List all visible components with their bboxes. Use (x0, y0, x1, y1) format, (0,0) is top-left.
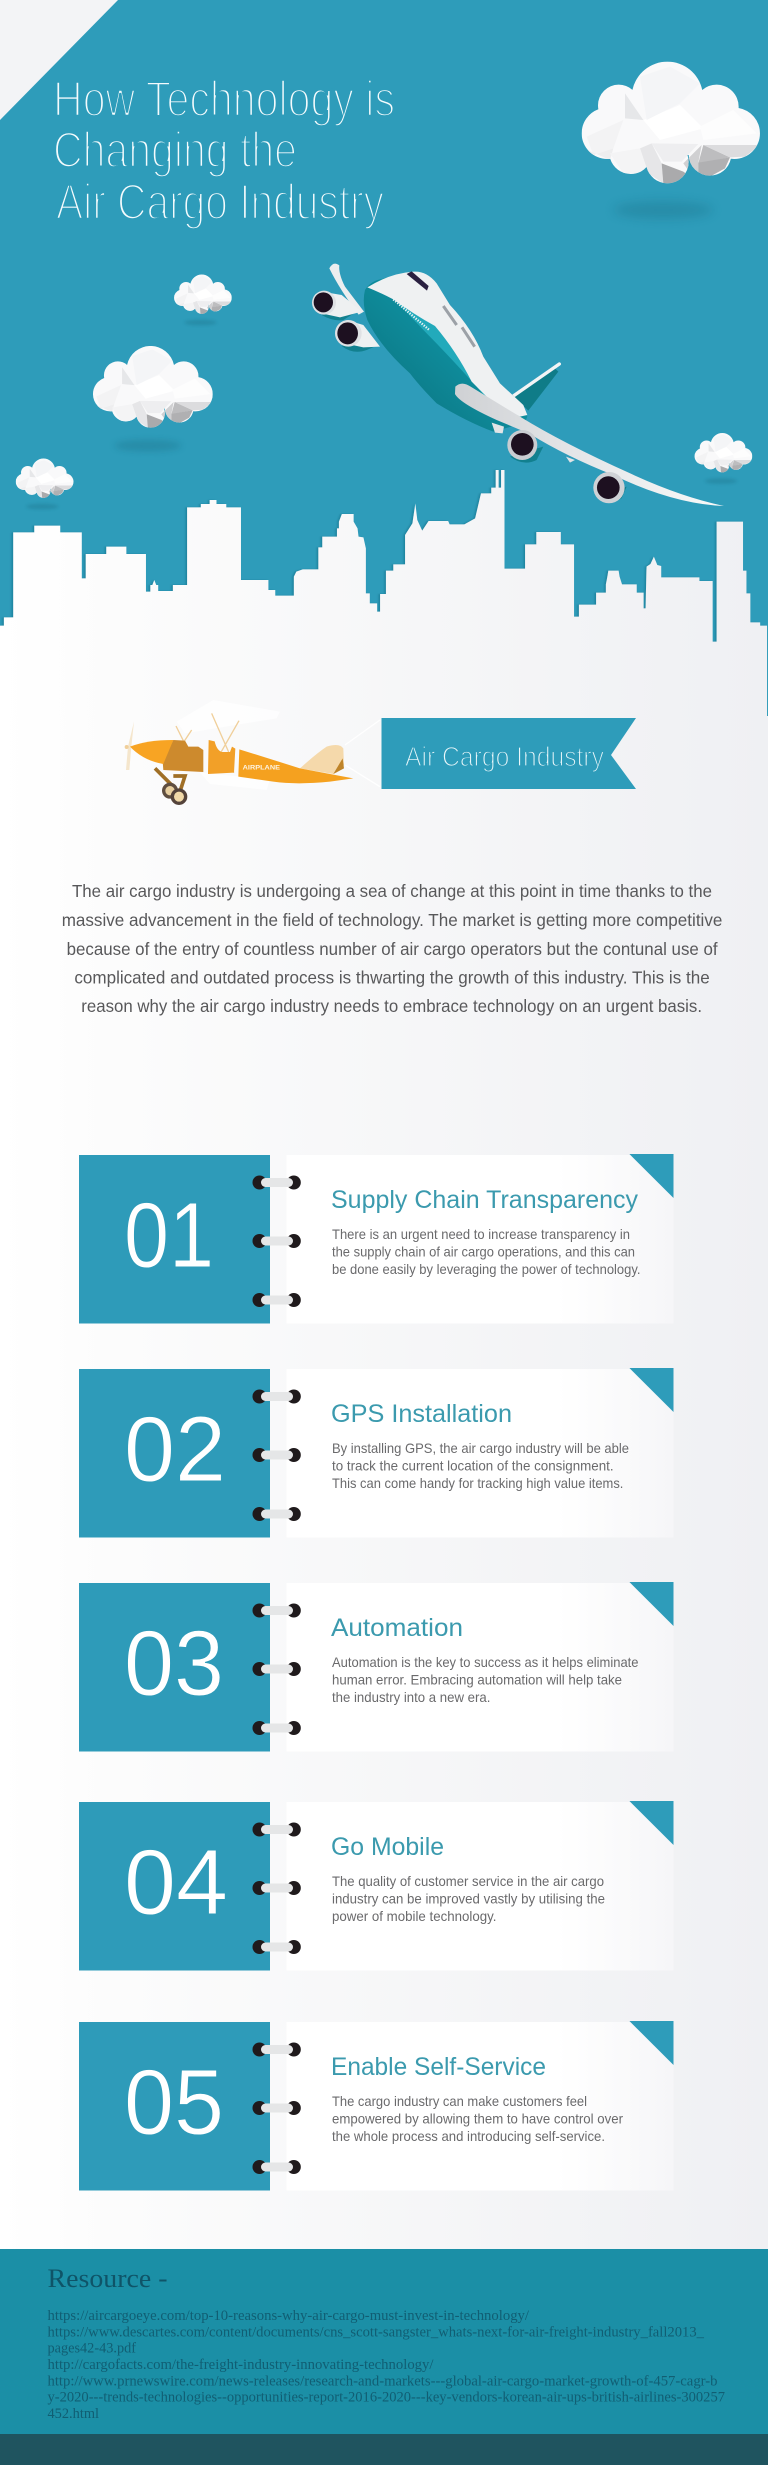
rear fuselage (238, 749, 353, 783)
card 04: Go Mobile: The quality of customer service in the air cargo (332, 1874, 604, 1889)
title (53, 71, 395, 230)
corner fold (0, 0, 118, 120)
card 05: Enable Self-Service (79, 2021, 674, 2190)
far engine one (312, 291, 362, 320)
upper wing (177, 700, 280, 733)
resource links: https://aircargoeye.com/top-10-reasons-why-air-cargo-must-invest-in-technology/ (48, 2308, 530, 2324)
intro paragraph: The air cargo industry is undergoing a sea of change at this point in time thanks to the (72, 881, 712, 901)
tow lines (345, 720, 380, 787)
card 01: Supply Chain Transparency: be done easily by leveraging the power of technology. (332, 1262, 640, 1277)
city skyline (0, 470, 767, 727)
icon: small cloud top (172, 273, 234, 325)
title: Air Cargo Industry (56, 174, 384, 230)
lower wing (200, 773, 270, 790)
resource links: http://cargofacts.com/the-freight-industry-innovating-technology/ (48, 2357, 434, 2373)
resource links: pages42-43.pdf (48, 2341, 136, 2357)
resource links: https://www.descartes.com/content/documents/cns_scott-sangster_whats-next-for-air-freight-industry_fall2013_ (48, 2325, 705, 2341)
card 03: Automation: Automation (331, 1614, 463, 1642)
middle fuselage (208, 740, 235, 774)
resource links: y-2020---trends-technologies--opportunities-report-2016-2020---key-vendors-korean-air-ups-british-airlines-300257 (48, 2390, 725, 2406)
sky panel (0, 0, 768, 716)
near engine two (593, 472, 627, 503)
card 02: GPS Installation: 02 (124, 1397, 226, 1501)
intro paragraph: complicated and outdated process is thwarting the growth of this industry. This is the (74, 968, 710, 988)
card 04: Go Mobile: industry can be improved vastly by utilising the (332, 1892, 605, 1906)
card 02: GPS Installation: This can come handy for tracking high value items. (332, 1476, 623, 1491)
resource panel (0, 2249, 768, 2434)
card 05: Enable Self-Service: the whole process and introducing self-service. (332, 2129, 605, 2144)
fuselage belly (364, 272, 527, 432)
footer band (0, 2434, 768, 2465)
far wing (329, 264, 364, 315)
icon: orange biplane (125, 700, 380, 803)
light stripe (392, 297, 493, 407)
card 04: Go Mobile: 04 (124, 1830, 228, 1934)
small struts (176, 713, 239, 773)
nose (130, 740, 173, 764)
card 01: Supply Chain Transparency: There is an urgent need to increase transparency in (332, 1227, 630, 1242)
card 03: Automation (79, 1582, 674, 1752)
card 03: Automation: 03 (124, 1611, 224, 1715)
card 01: Supply Chain Transparency: the supply chain of air cargo operations, and this can (332, 1244, 635, 1260)
card 01: Supply Chain Transparency (79, 1154, 674, 1324)
far engine two (335, 320, 380, 352)
grey door stripes (443, 306, 475, 347)
near wing (455, 384, 724, 506)
card 02: GPS Installation: GPS Installation (331, 1400, 512, 1428)
title: How Technology is (53, 71, 395, 127)
icon: large cloud (577, 57, 767, 219)
card 03: Automation: human error. Embracing automation will help take (332, 1672, 622, 1688)
card 04: Go Mobile (79, 1801, 674, 1970)
card 05: Enable Self-Service: 05 (124, 2050, 224, 2154)
icon: medium cloud (90, 343, 217, 451)
card 03: Automation: Automation is the key to success as it helps eliminate (332, 1655, 639, 1670)
card 02: GPS Installation: By installing GPS, the air cargo industry will be able (332, 1441, 629, 1456)
resource heading: Resource - (48, 2264, 168, 2293)
white top of fuselage (367, 272, 527, 417)
card 05: Enable Self-Service: empowered by allowing them to have control over (332, 2112, 623, 2126)
icon: jet airplane (312, 264, 724, 506)
intro paragraph: reason why the air cargo industry needs to embrace technology on an urgent basis. (81, 996, 702, 1016)
card 03: Automation: the industry into a new era. (332, 1690, 490, 1705)
card 01: Supply Chain Transparency: Supply Chain Transparency (331, 1186, 638, 1214)
card 01: Supply Chain Transparency: 01 (124, 1183, 214, 1287)
front fuselage (163, 740, 203, 772)
resource links (48, 2308, 725, 2422)
intro paragraph (62, 881, 722, 1016)
landing gear (155, 768, 185, 797)
intro paragraph: because of the entry of countless number of air cargo operators but the contunal use of (67, 939, 718, 959)
propeller (126, 722, 134, 770)
resource links: 452.html (48, 2406, 99, 2422)
card 02: GPS Installation (79, 1368, 674, 1538)
window dots (393, 299, 429, 330)
icon: small cloud right (693, 431, 754, 484)
resource links: http://www.prnewswire.com/news-releases/research-and-markets---global-air-cargo-market-growth-of-457-cagr-b (48, 2373, 717, 2389)
tail (300, 745, 344, 774)
cockpit windows (407, 271, 429, 291)
near engine one (507, 430, 543, 463)
card 04: Go Mobile: Go Mobile (331, 1833, 444, 1861)
tail fin (513, 368, 558, 411)
card 05: Enable Self-Service: Enable Self-Service (331, 2053, 546, 2081)
icon: small cloud left (14, 457, 76, 509)
card 05: Enable Self-Service: The cargo industry can make customers feel (332, 2094, 587, 2109)
intro paragraph: massive advancement in the field of technology. The market is getting more competitive (62, 910, 722, 930)
title: Changing the (53, 122, 297, 178)
ribbon banner (382, 718, 636, 789)
icon: orange biplane: AIRPLANE (243, 764, 281, 771)
ribbon banner: Air Cargo Industry (405, 741, 604, 772)
card 04: Go Mobile: power of mobile technology. (332, 1909, 496, 1924)
card 02: GPS Installation: to track the current location of the consignment. (332, 1458, 614, 1474)
